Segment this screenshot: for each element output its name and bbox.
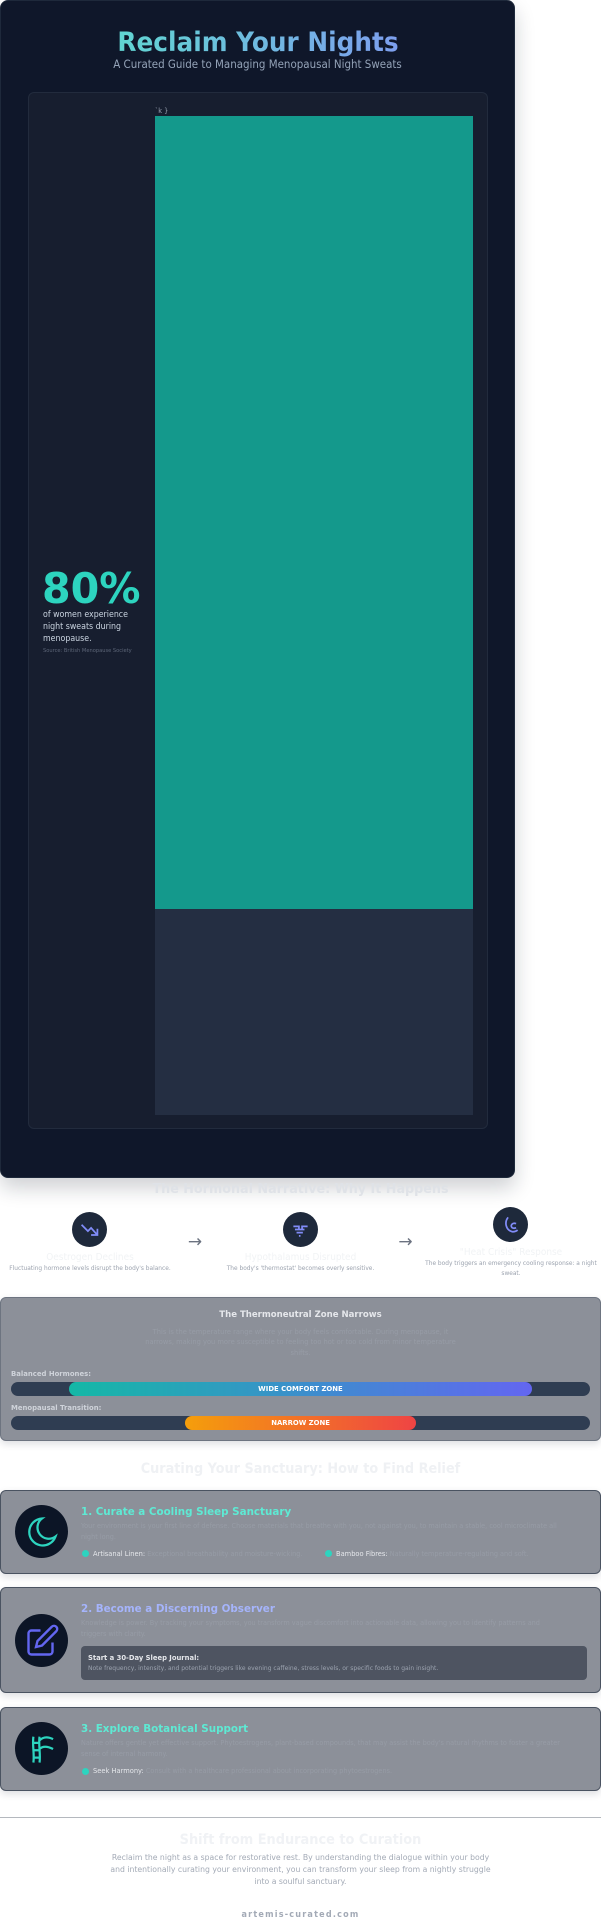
arrow: → xyxy=(398,1232,413,1252)
card body xyxy=(81,1619,540,1638)
heading: closing: Shift from Endurance to Curation xyxy=(180,1832,421,1848)
card body: night long. xyxy=(81,1532,116,1540)
card body: Knowledge is power. By tracking your symptoms, you transform vague discomfort into actionable data, allowing you to identify patterns and xyxy=(81,1619,540,1627)
step text: The body triggers an emergency cooling response: a night xyxy=(425,1260,597,1267)
big number: 80% xyxy=(42,564,141,613)
statistic text: night sweats during xyxy=(42,621,121,631)
callout heading: Start a 30-Day Sleep Journal: xyxy=(88,1653,199,1662)
closing paragraph xyxy=(110,1852,491,1886)
zone fill: NARROW ZONE xyxy=(271,1418,330,1427)
icon: thermostat xyxy=(283,1212,318,1247)
icon: moon xyxy=(15,1505,68,1558)
source: Source: British Menopause Society xyxy=(42,648,131,654)
bullet: linen: Artisanal Linen: Exceptional breathability and moisture-wicking. xyxy=(93,1549,302,1558)
step title: Oestrogen Declines xyxy=(46,1252,134,1263)
statistic text: of women experience xyxy=(42,609,127,619)
bullet dot xyxy=(325,1550,332,1557)
chart label glitch: `k } xyxy=(155,107,168,115)
step 2 xyxy=(226,1212,374,1272)
title: Reclaim Your Nights xyxy=(117,27,399,58)
card: observer xyxy=(0,1587,601,1693)
step text xyxy=(425,1260,597,1276)
card title: 1. Curate a Cooling Sleep Sanctuary xyxy=(81,1504,291,1518)
subtitle: A Curated Guide to Managing Menopausal Night Sweats xyxy=(113,58,402,71)
card body xyxy=(81,1739,560,1758)
bullet: bamboo: Bamboo Fibres: Naturally temperature-regulating and soft. xyxy=(336,1549,529,1558)
footer: artemis-curated.com xyxy=(241,1910,360,1920)
divider xyxy=(0,1817,601,1818)
card body xyxy=(81,1522,557,1540)
step 3 xyxy=(425,1207,597,1276)
step text: The body's 'thermostat' becomes overly sensitive. xyxy=(227,1265,374,1272)
description: narrows, making you more susceptible to feeling too hot or too cold from minor temperature xyxy=(145,1337,456,1346)
panel heading: The Thermoneutral Zone Narrows xyxy=(219,1309,382,1320)
statistic text xyxy=(42,609,128,643)
zone fill xyxy=(185,1416,416,1430)
card title: 3. Explore Botanical Support xyxy=(81,1722,248,1734)
bullet: harmony: Seek Harmony: Consult with a healthcare professional about incorporating phytoestrogens. xyxy=(93,1766,392,1775)
statistic text: menopause. xyxy=(42,633,91,643)
card: sleep sanctuary xyxy=(0,1490,601,1574)
card body: triggers with clarity. xyxy=(81,1630,146,1638)
step title: Hypothalamus Disrupted xyxy=(245,1252,356,1263)
step title: "Heat Crisis" Response xyxy=(460,1247,562,1258)
step text: Fluctuating hormone levels disrupt the body's balance. xyxy=(9,1265,171,1272)
chart: proportion bar xyxy=(155,116,473,1115)
bar segment: 80 percent xyxy=(155,116,473,909)
card body: Nature offers gentle yet effective support. Phytoestrogens, plant-based compounds, that may assist the body's natural rhythms to foster a greater xyxy=(81,1739,560,1747)
bar: wide comfort zone xyxy=(11,1382,590,1396)
bullet dot xyxy=(82,1768,89,1775)
callout text: Note frequency, intensity, and potential triggers like evening caffeine, stress levels, or specific foods to gain insight. xyxy=(88,1664,438,1672)
card body: sense of internal harmony. xyxy=(81,1750,168,1758)
card body: Your environment is your first line of defense. Choose materials that breathe with you, not against you, to maintain a stable, cool microclimate all xyxy=(81,1522,557,1530)
icon: downward trend xyxy=(72,1212,107,1247)
panel: thermoneutral zone xyxy=(0,1297,601,1441)
step 1 xyxy=(9,1212,171,1272)
description: shifts. xyxy=(290,1348,311,1357)
icon: journal pencil xyxy=(15,1614,68,1667)
closing paragraph: and intentionally curating your environment, you can transform your sleep from a nightly struggle xyxy=(110,1864,491,1874)
zone fill xyxy=(69,1382,532,1396)
heading: hormonal narrative: The Hormonal Narrative: Why It Happens xyxy=(152,1181,449,1197)
label: menopausal: Menopausal Transition: xyxy=(11,1403,101,1412)
bullet dot xyxy=(82,1550,89,1557)
card: botanical xyxy=(0,1707,601,1791)
description xyxy=(145,1327,456,1357)
panel: hero xyxy=(0,0,515,1178)
icon: botanical xyxy=(15,1722,68,1775)
callout: journal xyxy=(81,1646,587,1680)
heading: relief: Curating Your Sanctuary: How to Find Relief xyxy=(141,1461,460,1477)
step text: sweat. xyxy=(501,1270,521,1276)
zone fill: WIDE COMFORT ZONE xyxy=(258,1384,343,1393)
panel: statistic xyxy=(28,92,488,1129)
bar: narrow zone xyxy=(11,1416,590,1430)
closing paragraph: Reclaim the night as a space for restorative rest. By understanding the dialogue within your body xyxy=(112,1852,489,1862)
card title: 2. Become a Discerning Observer xyxy=(81,1602,275,1614)
description: This is the temperature range where your body feels comfortable. During menopause, it xyxy=(153,1327,448,1336)
closing paragraph: into a soulful sanctuary. xyxy=(254,1876,347,1886)
icon: moon heat xyxy=(493,1207,528,1242)
label: balanced: Balanced Hormones: xyxy=(11,1369,91,1378)
arrow: → xyxy=(188,1232,202,1252)
